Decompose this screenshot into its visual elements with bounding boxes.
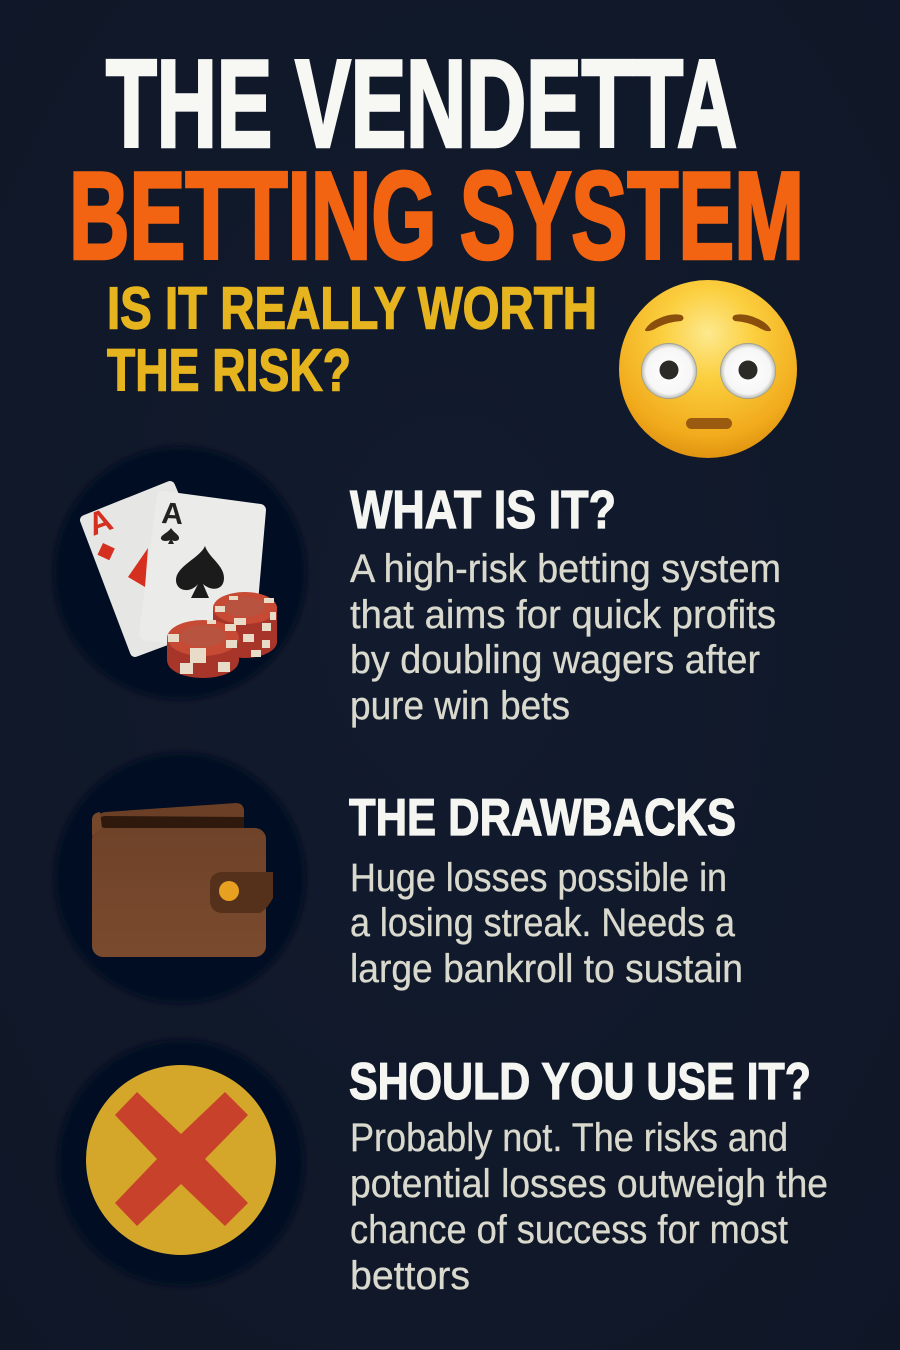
text: what is it description: that aims for quick profits xyxy=(350,593,776,637)
clasp xyxy=(210,872,273,913)
icon: flushed face emoji xyxy=(619,280,797,458)
text: should you use it description: chance of success for most xyxy=(350,1208,788,1252)
lower chip stack xyxy=(167,620,239,678)
text: should you use it description: bettors xyxy=(350,1254,470,1298)
icon: playing cards and chips xyxy=(54,447,306,699)
text: what is it description: pure win bets xyxy=(350,684,570,728)
subtitle xyxy=(107,276,597,404)
title xyxy=(69,36,804,286)
heading: what is it: WHAT IS IT? xyxy=(350,480,616,540)
text: drawbacks description: a losing streak. Needs a xyxy=(350,901,736,945)
front card xyxy=(145,497,260,648)
text: what is it description: A high-risk betting system xyxy=(350,547,781,591)
text: should you use it description: potential losses outweigh the xyxy=(350,1162,828,1206)
back card xyxy=(83,486,226,652)
back card: A xyxy=(83,501,117,543)
heading: the drawbacks: THE DRAWBACKS xyxy=(349,789,736,847)
subtitle: IS IT REALLY WORTH xyxy=(107,276,597,342)
text: drawbacks description: large bankroll to sustain xyxy=(350,947,743,991)
front card: A xyxy=(161,497,184,531)
subtitle: THE RISK? xyxy=(107,338,351,404)
text: should you use it description: Probably not. The risks and xyxy=(350,1116,788,1160)
text: drawbacks description: Huge losses possible in xyxy=(350,856,727,900)
text: what is it description: by doubling wagers after xyxy=(350,638,760,682)
icon: red x in yellow circle xyxy=(58,1040,304,1286)
text: should you use it description xyxy=(350,1116,828,1298)
icon: wallet xyxy=(55,753,305,1003)
text: drawbacks description xyxy=(350,856,743,991)
heading: should you use it: SHOULD YOU USE IT? xyxy=(349,1053,811,1111)
upper chip stack xyxy=(213,592,277,658)
text: what is it description xyxy=(350,547,781,728)
